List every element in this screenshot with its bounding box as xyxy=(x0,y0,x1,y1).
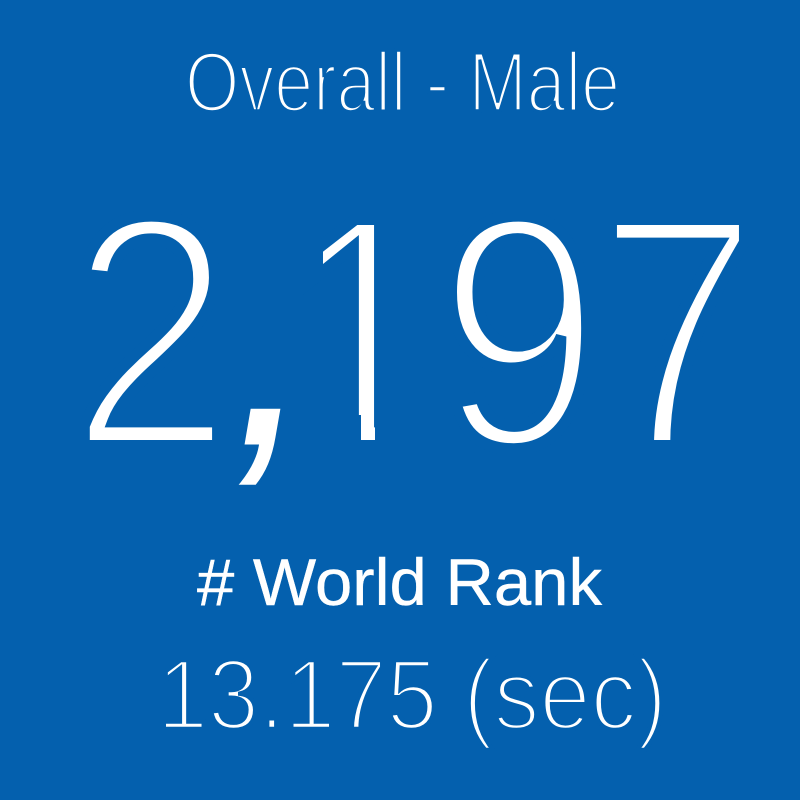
big number: rank value: 2 xyxy=(70,147,232,516)
big number: rank value: 9 xyxy=(438,147,600,516)
big number: rank value: 1 xyxy=(280,147,442,516)
heading: category: Overall - Male xyxy=(185,35,620,129)
big number: rank value: 7 xyxy=(597,147,759,516)
label: world rank: # World Rank xyxy=(197,545,603,619)
value: time in seconds: 13.175 (sec) xyxy=(157,639,667,751)
big number: rank value: , xyxy=(235,211,302,501)
